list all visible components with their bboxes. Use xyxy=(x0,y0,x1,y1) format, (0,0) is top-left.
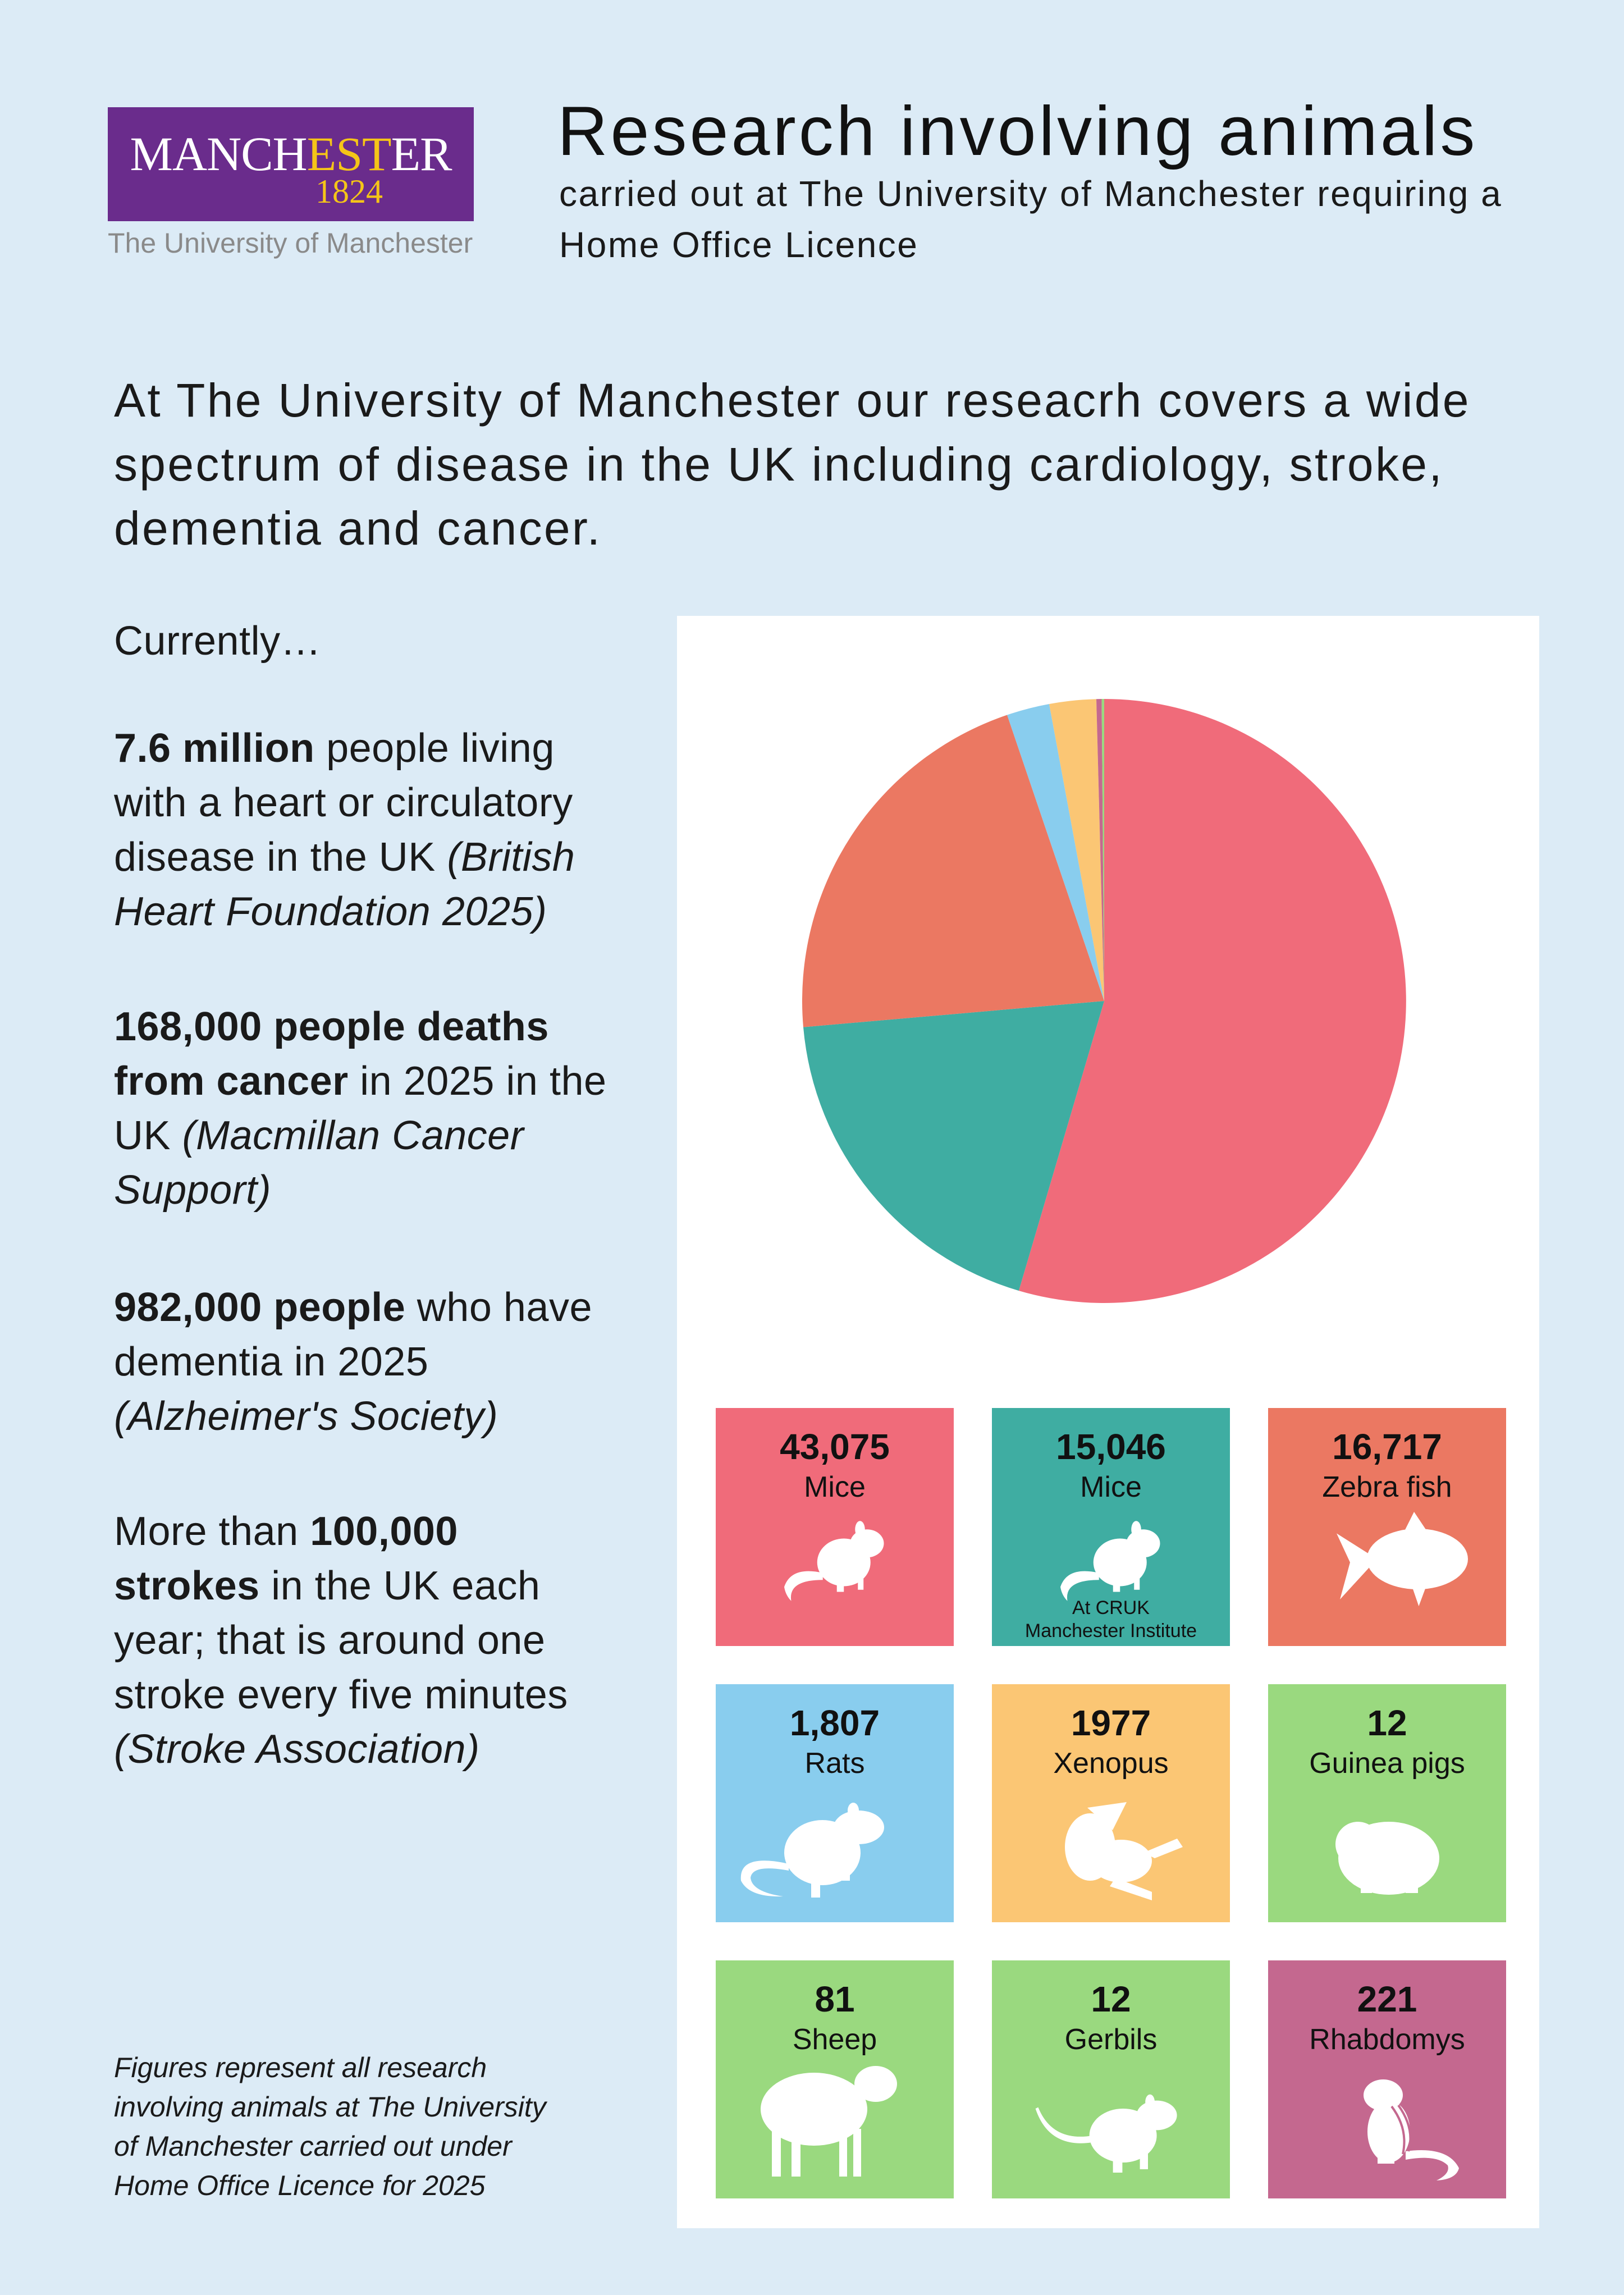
stat: dementia: dementia in 2025 xyxy=(114,1339,428,1384)
stat: stroke xyxy=(114,1509,568,1772)
tile: rats: Rats xyxy=(805,1747,864,1780)
currently label: Currently… xyxy=(114,619,321,664)
icon: fish xyxy=(1337,1512,1468,1606)
tile: zebra fish xyxy=(1268,1408,1506,1646)
icon: gerbil xyxy=(1035,2094,1177,2173)
footnote: Figures represent all research xyxy=(114,2052,487,2083)
tile: sheep xyxy=(716,1960,954,2198)
logo xyxy=(108,107,474,259)
tile: mice: Mice xyxy=(804,1471,866,1503)
logo box: MANCHESTER xyxy=(130,127,451,181)
stat: stroke: strokes in the UK each xyxy=(114,1563,540,1608)
tile: guinea pigs: Guinea pigs xyxy=(1309,1747,1465,1780)
tile: xenopus xyxy=(992,1684,1230,1922)
stat: stroke: More than 100,000 xyxy=(114,1509,458,1554)
tile: sheep: Sheep xyxy=(793,2023,877,2056)
stat: stroke: (Stroke Association) xyxy=(114,1727,480,1772)
tile: gerbils xyxy=(992,1960,1230,2198)
stat: stroke: year; that is around one xyxy=(114,1618,546,1663)
stat: stroke: stroke every five minutes xyxy=(114,1672,568,1717)
stat: dementia: (Alzheimer's Society) xyxy=(114,1394,498,1439)
stat: cancer: UK (Macmillan Cancer xyxy=(114,1113,524,1158)
stat: dementia: 982,000 people who have xyxy=(114,1285,592,1330)
icon: rat xyxy=(741,1803,884,1898)
panel: chart and tiles xyxy=(677,616,1539,2228)
subtitle: Home Office Licence xyxy=(559,225,918,265)
subtitle xyxy=(559,173,1502,265)
tile: mice CRUK: Mice xyxy=(1080,1471,1142,1503)
caption: CRUK xyxy=(1025,1597,1197,1642)
stat: heart disease: disease in the UK (British xyxy=(114,835,575,880)
tile: xenopus: 1977 xyxy=(1071,1703,1151,1743)
icon: guinea pig xyxy=(1335,1822,1439,1895)
tile: zebra fish: 16,717 xyxy=(1332,1427,1442,1467)
stat: cancer xyxy=(114,1004,607,1213)
logo caption: The University of Manchester xyxy=(108,227,473,259)
tile: guinea pigs xyxy=(1268,1684,1506,1922)
caption: CRUK: Manchester Institute xyxy=(1025,1620,1197,1642)
intro paragraph: spectrum of disease in the UK including cardiology, stroke, xyxy=(114,438,1444,491)
icon: sheep xyxy=(761,2066,897,2177)
tile: mice: 43,075 xyxy=(780,1427,890,1467)
stat: cancer: 168,000 people deaths xyxy=(114,1004,549,1049)
tile: rhabdomys: 221 xyxy=(1357,1979,1417,2019)
tile: sheep: 81 xyxy=(815,1979,855,2019)
stat: cancer: Support) xyxy=(114,1168,271,1213)
logo box xyxy=(108,107,474,221)
tile: rhabdomys xyxy=(1268,1960,1506,2198)
footnote: of Manchester carried out under xyxy=(114,2131,512,2162)
stat: heart disease: Heart Foundation 2025) xyxy=(114,889,547,934)
tile: xenopus: Xenopus xyxy=(1053,1747,1169,1780)
footnote xyxy=(114,2052,548,2201)
tile: rhabdomys: Rhabdomys xyxy=(1309,2023,1465,2056)
tile: rats xyxy=(716,1684,954,1922)
subtitle: carried out at The University of Manchester requiring a xyxy=(559,173,1502,214)
stat: heart disease: with a heart or circulatory xyxy=(114,780,573,825)
footnote: involving animals at The University xyxy=(114,2091,546,2123)
stat: heart disease: 7.6 million people living xyxy=(114,726,555,771)
tile: guinea pigs: 12 xyxy=(1367,1703,1407,1743)
title: Research involving animals xyxy=(557,93,1477,170)
icon: frog xyxy=(1065,1802,1183,1900)
icon: striped mouse xyxy=(1364,2079,1459,2180)
logo box: 1824 xyxy=(315,173,383,210)
intro paragraph: dementia and cancer. xyxy=(114,502,602,555)
tile: gerbils: Gerbils xyxy=(1065,2023,1157,2056)
icon: mouse xyxy=(784,1521,884,1601)
caption: CRUK: At CRUK xyxy=(1072,1597,1150,1619)
icon: mouse xyxy=(1060,1521,1160,1601)
stat: cancer: from cancer in 2025 in the xyxy=(114,1059,607,1104)
intro paragraph xyxy=(114,374,1471,555)
tile: mice CRUK xyxy=(992,1408,1230,1646)
stat: dementia xyxy=(114,1285,592,1439)
tile: rats: 1,807 xyxy=(790,1703,880,1743)
intro paragraph: At The University of Manchester our reseacrh covers a wide xyxy=(114,374,1471,427)
tile: mice CRUK: 15,046 xyxy=(1056,1427,1166,1467)
tile: gerbils: 12 xyxy=(1091,1979,1131,2019)
stat: heart disease xyxy=(113,726,575,934)
tile: mice xyxy=(716,1408,954,1646)
tile: zebra fish: Zebra fish xyxy=(1322,1471,1452,1503)
footnote: Home Office Licence for 2025 xyxy=(114,2170,485,2201)
